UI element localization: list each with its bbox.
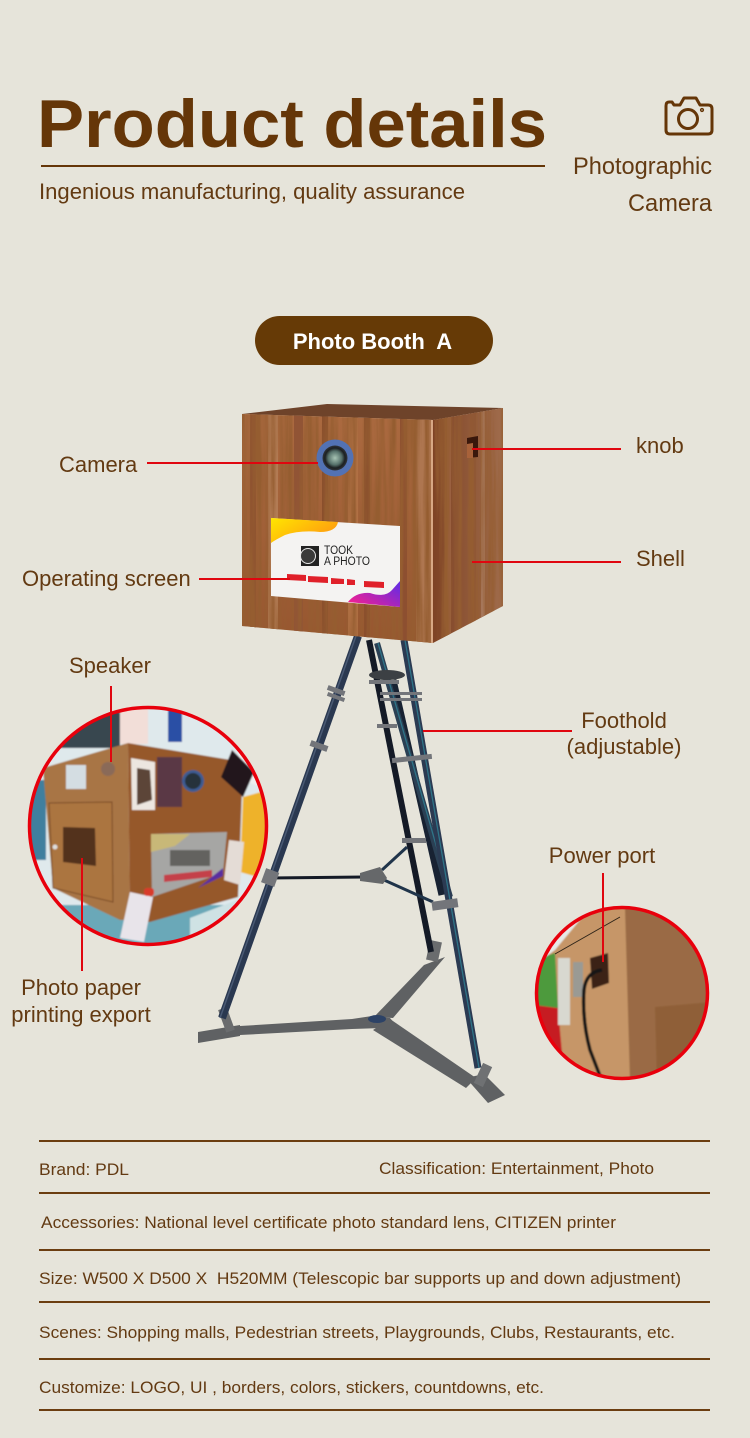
cube top [242, 404, 503, 420]
screen buttons [287, 574, 384, 588]
callout labels: (adjustable) [567, 734, 681, 759]
booth screen [151, 832, 227, 897]
photo strip on corner [221, 750, 254, 797]
screen logo text: A PHOTO [324, 556, 370, 568]
booth side panel [43, 743, 130, 920]
power socket [590, 953, 609, 989]
specification table: Accessories: National level certificate photo standard lens, CITIZEN printer [41, 1213, 616, 1232]
callout labels: Power port [549, 843, 655, 868]
white coin slot [66, 765, 86, 789]
button: Photo Booth A: Photo Booth A [293, 329, 452, 354]
lens [182, 770, 204, 792]
specification table: Size: W500 X D500 X H520MM (Telescopic bar supports up and down adjustment) [39, 1269, 681, 1288]
camera type label [573, 153, 713, 217]
tripod base [198, 940, 505, 1103]
subtitle with rule: Ingenious manufacturing, quality assurance [39, 179, 465, 204]
callout labels [11, 433, 685, 1027]
callout labels: Operating screen [22, 566, 191, 591]
button: Photo Booth A [255, 316, 493, 365]
callout labels: printing export [11, 1002, 151, 1027]
photo booth cube [242, 404, 503, 650]
screen logo [170, 850, 210, 866]
title: Product details [37, 86, 547, 162]
leader lines [82, 449, 621, 971]
seam [555, 917, 620, 954]
specification table: Classification: Entertainment, Photo [379, 1159, 654, 1178]
screen logo text [324, 545, 370, 568]
specification table [39, 1141, 710, 1410]
cube front wood [242, 410, 433, 650]
tripod legs [220, 636, 479, 1068]
bottom photo [120, 892, 153, 942]
callout labels: Camera [59, 452, 138, 477]
detail circle: power port [535, 905, 712, 1081]
callout labels: Shell [636, 546, 685, 571]
specification table: Scenes: Shopping malls, Pedestrian streets, Playgrounds, Clubs, Restaurants, etc. [39, 1323, 675, 1342]
callout labels: Speaker [69, 653, 151, 678]
speaker grille [101, 762, 115, 776]
power cable [584, 970, 602, 1076]
knob [467, 436, 478, 458]
specification table: Brand: PDL [39, 1160, 129, 1179]
screen logo icon [300, 546, 319, 566]
photo strips [157, 757, 182, 807]
phone holder strip [558, 958, 570, 1025]
hanging photo [224, 840, 244, 885]
operating screen [271, 518, 400, 607]
screen logo text: TOOK [324, 545, 353, 557]
lens [316, 440, 354, 476]
callout labels: Photo paper [21, 975, 141, 1000]
callout labels: Foothold [581, 708, 667, 733]
portrait photo [131, 758, 155, 810]
specification table: Customize: LOGO, UI , borders, colors, stickers, countdowns, etc. [39, 1378, 544, 1397]
lower panel on side [656, 1003, 705, 1068]
cube side wood [433, 405, 503, 645]
callout labels: knob [636, 433, 684, 458]
wood corner side [625, 908, 712, 1081]
camera type label: Photographic [573, 153, 712, 180]
booth front panel [128, 743, 243, 922]
background through corner [535, 953, 558, 1008]
door with opening [49, 802, 113, 902]
detail circle: speaker and photo paper export [28, 707, 268, 950]
tripod stand [198, 636, 505, 1103]
camera type label: Camera [628, 190, 713, 217]
tripod clamps [261, 670, 458, 911]
screen red buttons [164, 870, 212, 882]
icon: camera [666, 98, 712, 134]
tripod spreader [270, 847, 433, 902]
